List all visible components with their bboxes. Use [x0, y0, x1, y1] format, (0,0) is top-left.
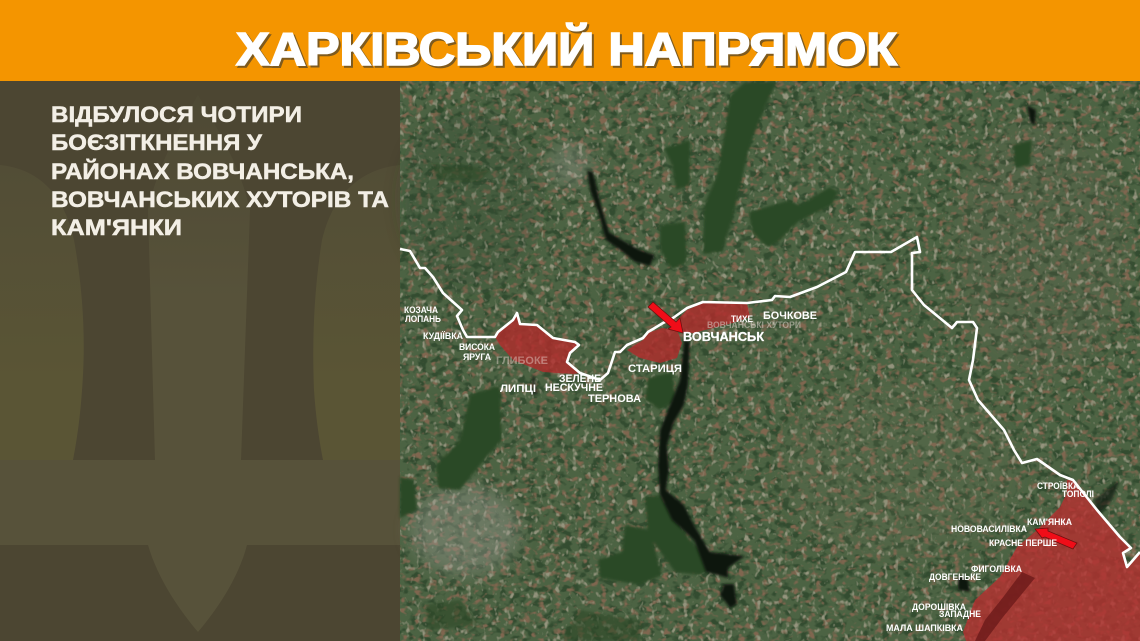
label: Красне Перше: КРАСНЕ ПЕРШЕ [989, 538, 1057, 548]
rivers and reservoir [532, 105, 1120, 608]
label: Тополі: ТОПОЛІ [1062, 489, 1094, 499]
occupied zone: south-east [963, 480, 1140, 641]
dark strips in south-east zone [975, 572, 1035, 641]
left panel with trident emblem [0, 81, 400, 641]
summary text block: БОЄЗІТКНЕННЯ У [51, 130, 262, 155]
label: Висока Яруга: ВИСОКА [459, 342, 495, 352]
large-scale brightness variation [400, 110, 1130, 575]
label: Зелене: ЗЕЛЕНЕ [559, 373, 601, 385]
occupied zone: Vovchansk east [677, 303, 750, 333]
trident left wing [0, 165, 84, 460]
label: Довгеньке: ДОВГЕНЬКЕ [929, 572, 981, 582]
label: Вовчанські Хутори: ВОВЧАНСЬКІ ХУТОРИ [707, 320, 801, 330]
label: Козача Лопань [404, 305, 441, 324]
arrow: attack on Vovchansk [648, 302, 683, 333]
label: Липці: ЛИПЦІ [500, 383, 536, 395]
label: Козача Лопань: ЛОПАНЬ [405, 314, 441, 324]
trident centre prong [148, 95, 250, 460]
label: Тихе: ТИХЕ [731, 314, 753, 324]
label: Кудіївка: КУДІЇВКА [423, 331, 463, 341]
label: Висока Яруга [459, 342, 495, 362]
label: Глибоке: ГЛИБОКЕ [496, 355, 548, 367]
label: Нескучне: НЕСКУЧНЕ [545, 382, 603, 394]
summary text block: ВОВЧАНСЬКИХ ХУТОРІВ ТА [51, 187, 389, 212]
header band [0, 0, 1140, 81]
label: Висока Яруга: ЯРУГА [463, 352, 491, 362]
forests [400, 81, 1032, 641]
label: Стариця: СТАРИЦЯ [628, 363, 682, 375]
label: Бочкове: БОЧКОВЕ [763, 310, 817, 322]
summary text block: РАЙОНАХ ВОВЧАНСЬКА, [51, 159, 354, 184]
label: Кам'янка: КАМ'ЯНКА [1027, 517, 1072, 527]
label: Западне: ЗАПАДНЕ [939, 609, 981, 619]
occupied zone: Hlyboke [495, 313, 580, 374]
label: Вовчанськ: ВОВЧАНСЬК [683, 329, 764, 344]
trident crossbar and point [0, 460, 400, 632]
label: Строївка: СТРОЇВКА [1037, 481, 1079, 491]
summary text block: КАМ'ЯНКИ [51, 215, 182, 240]
label: Нововасилівка: НОВОВАСИЛІВКА [951, 524, 1027, 534]
occupied zone: Vovchansk west [627, 328, 682, 363]
label: Мала Шапківка: МАЛА ШАПКІВКА [886, 623, 963, 633]
label: Дорошівка: ДОРОШІВКА [912, 602, 966, 612]
arrow: attack on Kamianka [1035, 528, 1077, 549]
satellite map [400, 81, 1140, 641]
summary text block: ВІДБУЛОСЯ ЧОТИРИ [51, 102, 302, 127]
title: ХАРКІВСЬКИЙ НАПРЯМОК [236, 23, 898, 75]
summary text block [51, 102, 389, 240]
front line [400, 237, 1140, 567]
label: Тернова: ТЕРНОВА [588, 393, 641, 405]
label: Фиголівка: ФИГОЛІВКА [971, 564, 1022, 574]
trident right wing [313, 165, 400, 460]
label: Козача Лопань: КОЗАЧА [404, 305, 438, 315]
